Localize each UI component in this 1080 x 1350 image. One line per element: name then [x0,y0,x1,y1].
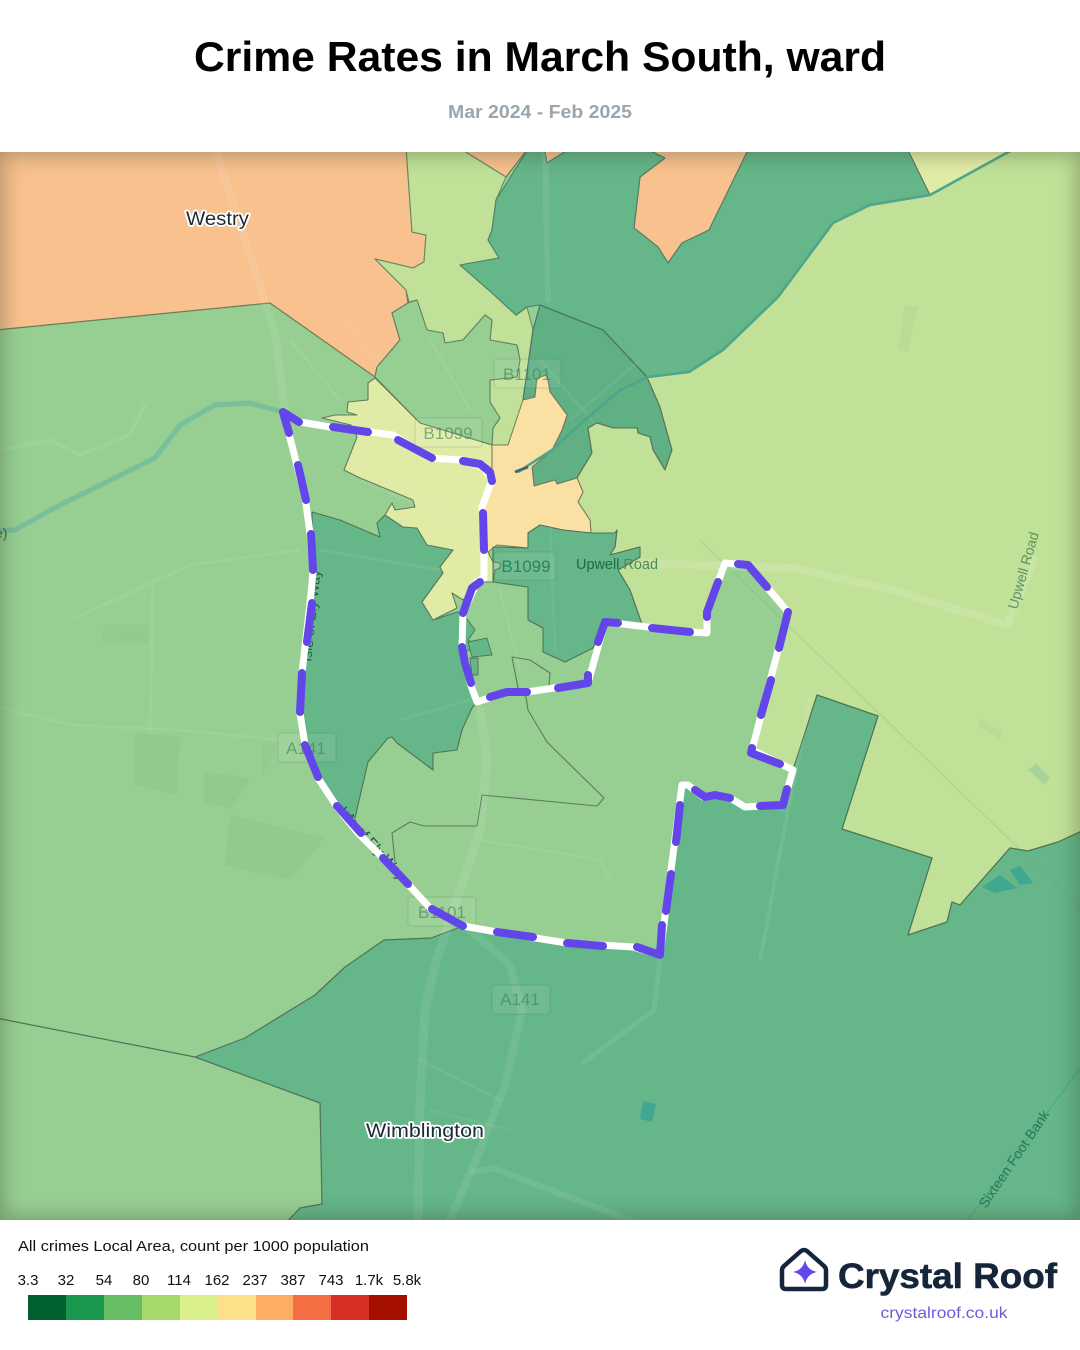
legend colour scale [28,1295,407,1320]
area: town dark green zone [523,305,672,486]
logo: Crystal Roof [782,1250,1057,1322]
road labels: B1099 [423,424,473,443]
logo wordmark: Crystal Roof [838,1257,1057,1296]
legend [18,1238,422,1320]
title: Crime Rates in March South, ward [194,33,886,80]
legend values: 114 [167,1272,191,1289]
base map: roads [148,152,1038,1220]
legend values: 32 [58,1272,74,1289]
road shields [278,359,561,1014]
legend values [18,1272,422,1289]
road name: Isle of Ely Way upper: Isle of Ely Way [298,569,324,662]
area: north-east dark green zone [460,146,930,377]
legend values: 1.7k [355,1272,384,1289]
place label: Wimblington: Wimblington [366,1121,484,1142]
road labels: B1101 [503,365,551,384]
area: top-right pale zone [908,152,1006,194]
legend values: 162 [204,1272,230,1289]
legend values: 237 [242,1272,268,1289]
area: north light green zone [375,146,533,445]
legend values: 54 [96,1272,112,1289]
area: south dark green zone [195,695,1080,1226]
ward outline: March South [283,412,793,955]
choropleth map [0,146,1080,1226]
area: west dark green zone [300,512,477,818]
area: central dark green zone [493,525,643,662]
base map: water [640,866,1033,1122]
area: small dark blocks by the ward edge [466,617,492,676]
base map: river [0,403,283,531]
area: inner ward boundaries [392,657,604,862]
legend values: 3.3 [18,1272,38,1289]
road name: Sixteen Foot Bank: Sixteen Foot Bank [975,1106,1053,1211]
legend values: 5.8k [393,1272,422,1289]
road labels: A141 [500,990,540,1009]
legend values: 80 [133,1272,149,1289]
road labels: A141 [286,739,326,758]
place label: Westry: Westry [186,209,250,230]
area: south-west boundary [0,1018,195,1057]
road name: Upwell Road vertical: Upwell Road [1005,530,1042,611]
legend title: All crimes Local Area, count per 1000 population [18,1238,369,1255]
road name: Upwell Road horizontal: Upwell Road [576,556,658,573]
icon: house with sparkle [782,1250,826,1289]
area: east light green zone [577,146,1080,935]
road labels: B1101 [418,903,466,922]
base map: fields [103,625,325,880]
area: peach town centre zone [482,375,591,552]
road labels: B1099 [501,557,551,576]
subtitle: date range: Mar 2024 - Feb 2025 [448,102,632,122]
legend values: 387 [280,1272,306,1289]
area: pale yellow-green town zone [322,378,493,620]
legend values: 743 [318,1272,344,1289]
road labels [286,365,551,1009]
road name: Isle of Ely Way lower: Isle of Ely Way [336,803,409,882]
area: north mid green zone [375,300,520,445]
area: Westry orange zone [0,146,750,377]
website: crystalroof.co.uk [880,1305,1009,1322]
